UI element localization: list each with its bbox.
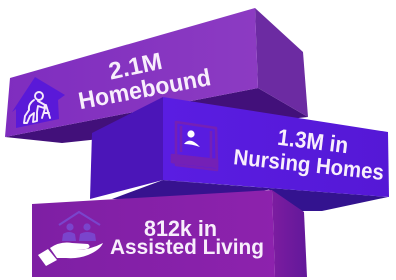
- panel: assisted living block: [32, 190, 307, 277]
- heading: 1.3M in Nursing Homes: 1.3M in: [276, 124, 350, 158]
- heading: 812k in Assisted Living: 812k in: [144, 216, 217, 241]
- heading: 2.1M Homebound: Homebound: [76, 64, 213, 115]
- panel: homebound block: [5, 8, 308, 143]
- icon: house with person using walker: [12, 77, 65, 128]
- heading: 812k in Assisted Living: Assisted Living: [110, 236, 264, 259]
- icon: hand holding house with two people: [38, 212, 103, 266]
- heading: 812k in Assisted Living: [110, 216, 264, 259]
- panel: nursing homes block: [90, 97, 389, 211]
- icon: person in bed: [172, 122, 217, 170]
- heading: 1.3M in Nursing Homes: [232, 124, 385, 185]
- heading: 2.1M Homebound: 2.1M: [106, 48, 165, 85]
- heading: 1.3M in Nursing Homes: Nursing Homes: [232, 144, 385, 185]
